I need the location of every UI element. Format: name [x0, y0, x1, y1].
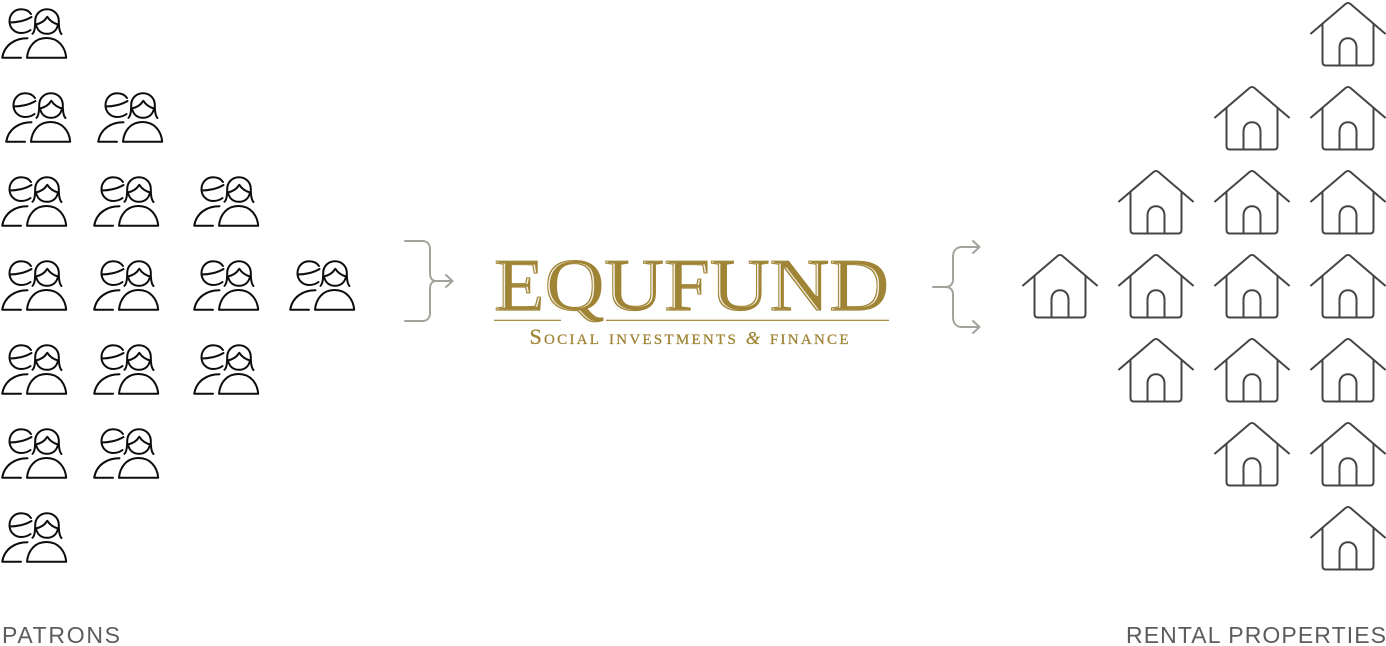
house icon [1215, 171, 1289, 234]
house icon [1119, 171, 1193, 234]
patron icon [2, 345, 66, 394]
patron icon [2, 429, 66, 478]
arrow: patrons into Equfund [405, 241, 452, 321]
patron icon [94, 177, 158, 226]
house icon [1311, 423, 1385, 486]
logo rule right [606, 320, 889, 321]
patron icon [194, 345, 258, 394]
patron icon [194, 177, 258, 226]
patron icon [2, 513, 66, 562]
patron icon [2, 177, 66, 226]
house icon [1215, 87, 1289, 150]
logo tagline: Social investments & finance [530, 324, 848, 349]
house icon [1023, 255, 1097, 318]
house icon [1119, 339, 1193, 402]
patron icon [98, 93, 162, 142]
patron icon [290, 261, 354, 310]
logo rule left [494, 320, 561, 321]
house icon [1119, 255, 1193, 318]
logo: Equfund [494, 245, 889, 349]
patron icon [94, 261, 158, 310]
patron icon [194, 261, 258, 310]
patron icon [2, 261, 66, 310]
house icon [1311, 255, 1385, 318]
house icon [1311, 507, 1385, 570]
house icon [1215, 255, 1289, 318]
patrons group [2, 9, 354, 562]
house icon [1311, 339, 1385, 402]
house icon [1311, 171, 1385, 234]
patron icon [94, 429, 158, 478]
house icon [1215, 339, 1289, 402]
rental properties group [1023, 3, 1385, 569]
patron icon [94, 345, 158, 394]
house icon [1311, 87, 1385, 150]
patron icon [2, 9, 66, 58]
logo wordmark: EQUFUND [494, 245, 889, 327]
house icon [1311, 3, 1385, 65]
house icon [1215, 423, 1289, 486]
patron icon [6, 93, 70, 142]
arrow: Equfund out to properties [933, 241, 980, 333]
